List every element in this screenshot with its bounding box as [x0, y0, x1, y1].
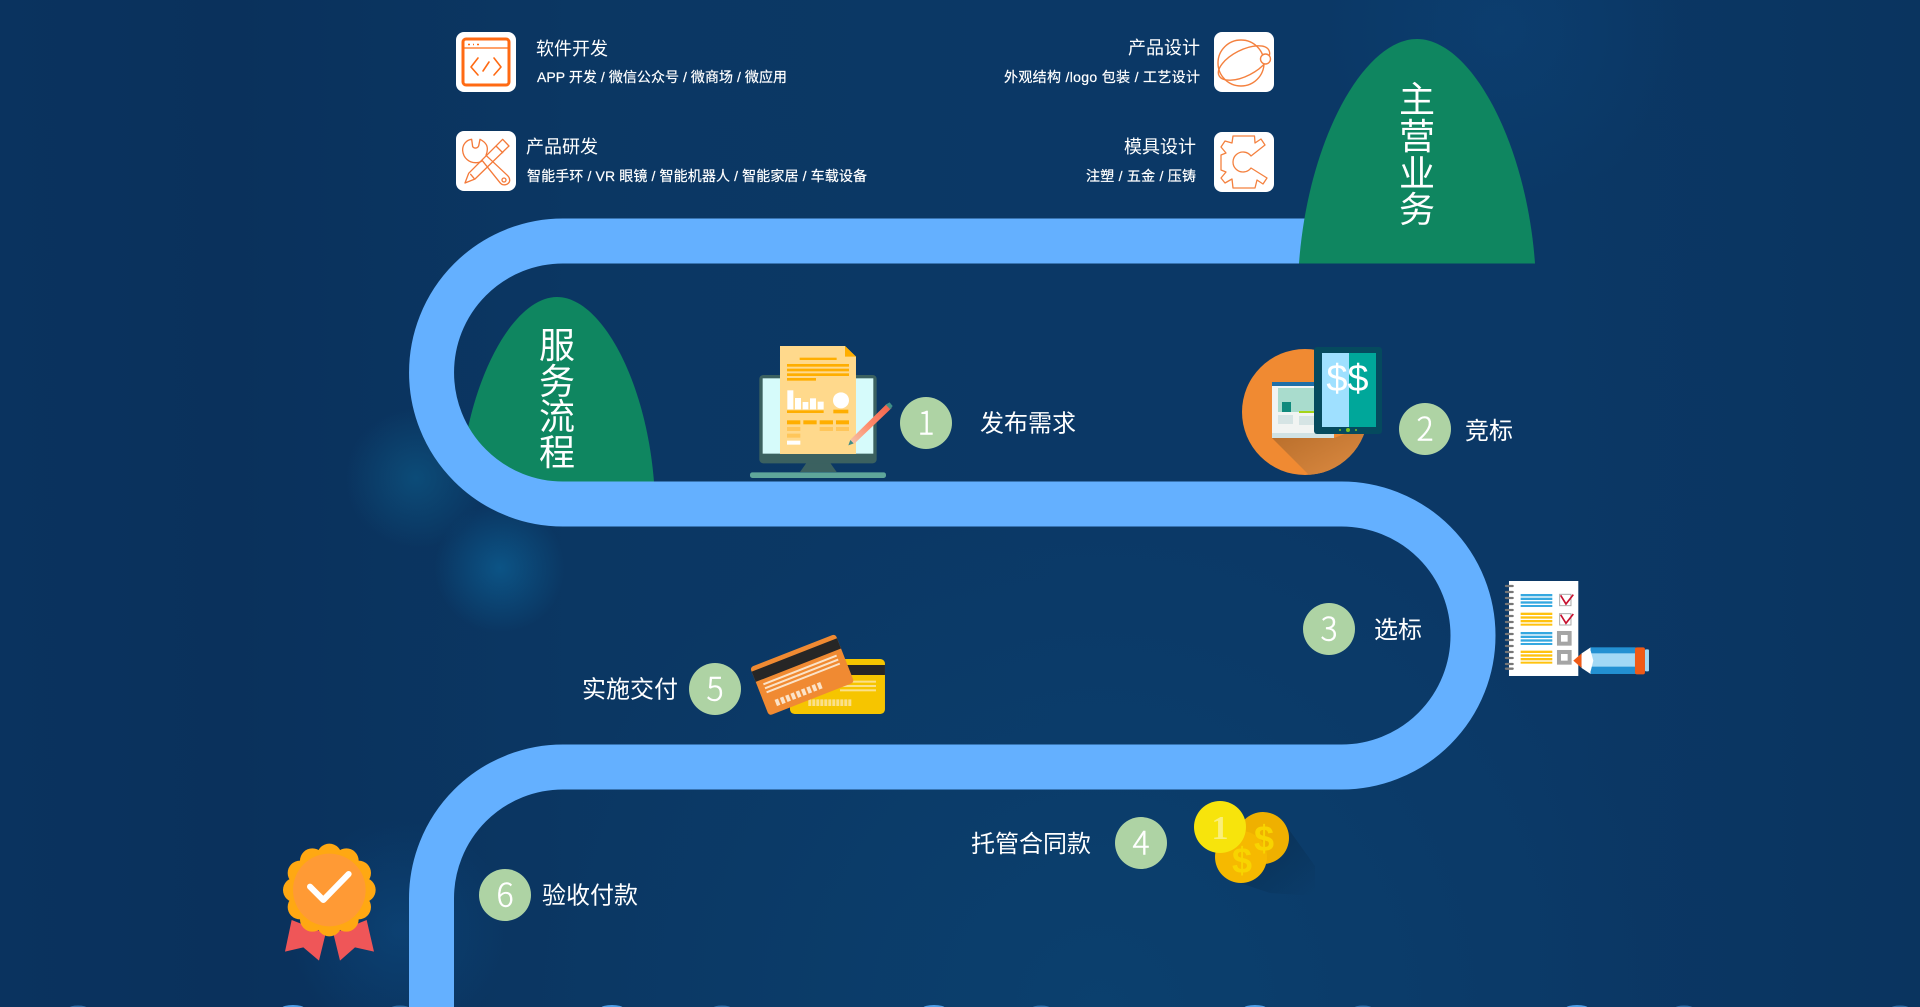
icon: code window — [456, 32, 516, 92]
step 4: escrow payment: 托管合同款 — [971, 831, 1091, 858]
icon: gold coins: $ — [1254, 818, 1274, 859]
icon: gold coins — [1194, 801, 1315, 896]
main business mound with heading — [1299, 39, 1535, 264]
icon: browser and tablet with dollars: $ — [1326, 358, 1348, 400]
icon: gold coins: $ — [1232, 840, 1252, 881]
main business mound with heading: 业 — [1399, 153, 1435, 194]
number badge 1: 1 — [917, 398, 935, 444]
icon: planet — [1213, 32, 1275, 92]
service process heading: 务 — [539, 361, 575, 402]
step 6: acceptance and payment — [283, 844, 638, 961]
step 5: delivery: 实施交付 — [582, 676, 678, 704]
item: product R&D: 智能手环 / VR 眼镜 / 智能机器人 / 智能家居 / 车载设备 — [527, 168, 867, 184]
number badge 6 — [479, 869, 531, 921]
main business mound with heading: 营 — [1399, 116, 1435, 157]
step 4: escrow payment — [971, 801, 1315, 896]
main business mound with heading: 主 — [1399, 79, 1435, 120]
item: software development — [456, 32, 787, 92]
number badge 5 — [689, 663, 741, 715]
icon: award badge — [283, 844, 376, 961]
item: product design: 外观结构 /logo 包装 / 工艺设计 — [1004, 69, 1200, 85]
number badge 2: 2 — [1416, 404, 1434, 450]
service process heading — [539, 325, 575, 473]
icon: checklist notebook and pencil — [1506, 581, 1649, 676]
service process heading: 流 — [539, 396, 575, 437]
step 1: publish requirement: 发布需求 — [980, 410, 1076, 438]
number badge 3 — [1303, 603, 1355, 655]
number badge 6: 6 — [496, 870, 514, 916]
number badge 4: 4 — [1132, 818, 1150, 864]
number badge 3: 3 — [1320, 604, 1338, 650]
bottom edge dots of next section — [69, 1005, 1909, 1007]
step 6: acceptance and payment: 验收付款 — [542, 882, 638, 910]
number badge 2 — [1399, 403, 1451, 455]
item: mould design: 注塑 / 五金 / 压铸 — [1086, 168, 1196, 184]
step 2: bidding: 竞标 — [1465, 418, 1513, 445]
item: mould design: 模具设计 — [1124, 137, 1196, 157]
step 3: selection: 选标 — [1374, 617, 1422, 644]
service process heading: 服 — [539, 325, 575, 366]
icon: bank cards — [750, 634, 885, 716]
service process mound — [460, 297, 654, 482]
item: mould design — [1086, 132, 1274, 192]
item: product design — [1004, 32, 1275, 92]
icon: browser and tablet with dollars: $ — [1347, 358, 1369, 400]
icon: gold coins: 1 — [1212, 810, 1228, 847]
main business mound with heading: 务 — [1399, 189, 1435, 230]
item: software development: 软件开发 — [536, 39, 608, 59]
item: software development: APP 开发 / 微信公众号 / 微商场 / 微应用 — [537, 69, 787, 85]
icon: gear — [1214, 132, 1274, 192]
number badge 5: 5 — [706, 664, 724, 710]
step 5: delivery — [582, 634, 885, 716]
number badge 1 — [900, 397, 952, 449]
step 1: publish requirement — [750, 346, 1076, 478]
step 2: bidding — [1242, 347, 1513, 480]
icon: wrench and pencil — [456, 131, 516, 191]
number badge 4 — [1115, 817, 1167, 869]
item: product R&D: 产品研发 — [526, 137, 598, 157]
item: product design: 产品设计 — [1128, 38, 1200, 58]
step 3: selection — [1303, 581, 1649, 676]
item: product R&D — [456, 131, 867, 191]
winding road — [432, 241, 1473, 1007]
service process heading: 程 — [539, 432, 575, 473]
icon: browser and tablet with dollars — [1242, 347, 1382, 480]
icon: monitor with document — [750, 346, 893, 478]
